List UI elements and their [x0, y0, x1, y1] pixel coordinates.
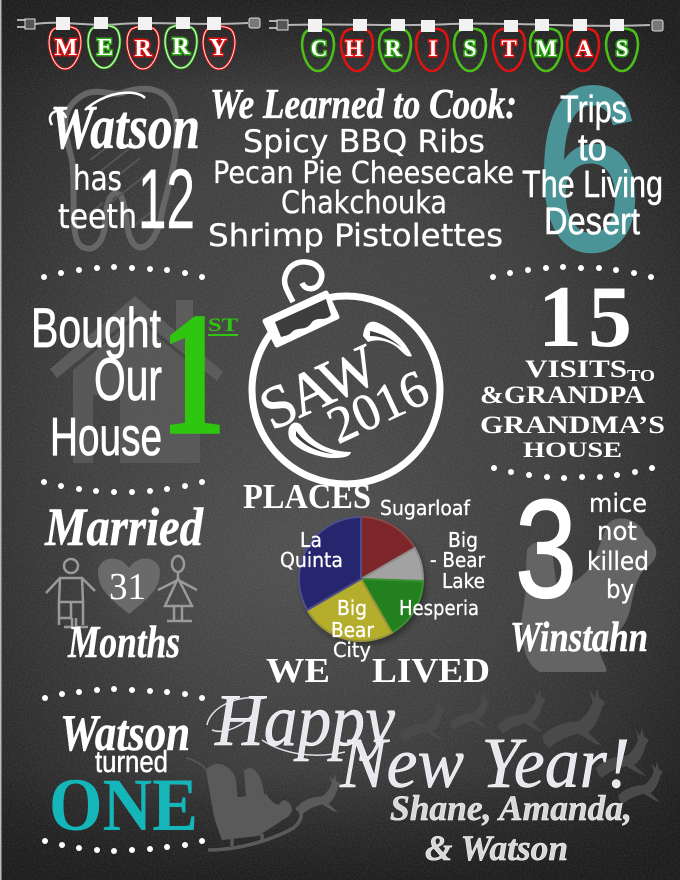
string lights: CHRISTMAS: M [535, 36, 557, 61]
panel: places we lived heading: PLACES [243, 477, 371, 516]
string lights: CHRISTMAS: S [616, 36, 628, 61]
panel: 6 trips to the living desert: Desert [544, 201, 640, 243]
panel: 6 trips to the living desert: Trips [560, 89, 627, 131]
panel: Watson turned one: turned [95, 744, 168, 779]
icon: stick figure woman [158, 556, 197, 621]
panel: family signature [390, 788, 632, 868]
pie labels: La [300, 528, 322, 552]
panel: Watson turned one: Watson [60, 705, 190, 762]
panel: bought our first house: Our [94, 346, 162, 413]
panel: bought our first house: House [50, 407, 162, 467]
panel: bought our first house: Bought [31, 296, 161, 359]
panel: we learned to cook: Spicy BBQ Ribs [243, 124, 485, 160]
panel: 3 mice not killed by Winstahn: by [606, 575, 634, 605]
panel: bought our first house: 1 [160, 277, 226, 472]
string lights: CHRISTMAS [269, 19, 663, 71]
string lights: MERRY: E [97, 35, 113, 61]
panel: Watson has 12 teeth: has [73, 159, 122, 199]
panel: 3 mice not killed by Winstahn [510, 470, 649, 661]
panel: happy new year [207, 680, 630, 803]
panel: places we lived heading: LIVED [372, 651, 490, 690]
panel: happy new year: Happy [214, 680, 395, 762]
panel: married 31 months: 31 [109, 566, 146, 608]
panel: 3 mice not killed by Winstahn: mice [589, 489, 647, 519]
string lights: MERRY: R [172, 34, 190, 60]
panel: bought our first house [31, 277, 238, 472]
panel: 15 visits: TO [627, 366, 655, 385]
panel: married 31 months: Married [44, 497, 204, 557]
panel: 3 mice not killed by Winstahn: 3 [515, 470, 577, 627]
panel: Watson has 12 teeth [50, 93, 200, 246]
pie labels: City [333, 638, 371, 662]
string lights: CHRISTMAS: S [464, 36, 476, 61]
panel: Watson has 12 teeth: Watson [50, 94, 200, 162]
string lights: CHRISTMAS: H [345, 36, 363, 61]
panel: we learned to cook [208, 82, 517, 254]
panel: places we lived heading: WE [266, 651, 330, 690]
icon: tooth [65, 89, 177, 249]
panel: family signature: & Watson [425, 828, 568, 868]
icon: house [50, 296, 223, 463]
panel: 6 trips to the living desert: to [578, 127, 607, 169]
dotted dividers [41, 264, 655, 854]
panel: Watson has 12 teeth: 12 [138, 152, 195, 246]
pie labels: Lake [442, 569, 485, 593]
panel: happy new year: New Year! [339, 723, 630, 803]
panel: 15 visits: HOUSE [523, 437, 622, 462]
pie labels: Big [337, 596, 367, 620]
panel: we learned to cook: Pecan Pie Cheesecake [213, 156, 514, 191]
icon: heart [98, 558, 160, 614]
panel: we learned to cook: Chakchouka [281, 185, 447, 221]
pie chart: places we lived [280, 496, 486, 662]
string lights: MERRY: R [134, 36, 152, 62]
pie labels: Bear [331, 618, 375, 642]
string lights: CHRISTMAS: R [385, 36, 402, 61]
icon: reindeer silhouettes [400, 688, 662, 804]
panel: married 31 months: Months [67, 616, 180, 667]
panel: 3 mice not killed by Winstahn: not [597, 517, 637, 547]
icon: sleigh silhouette [186, 758, 340, 850]
panel: married 31 months [44, 497, 204, 667]
string lights: MERRY [17, 17, 260, 69]
panel: family signature: Shane, Amanda, [390, 788, 632, 828]
icon: stick figure man [46, 559, 95, 627]
ornament year: 2016 [319, 360, 437, 455]
string lights: CHRISTMAS: C [311, 36, 327, 61]
panel: 15 visits: 15 [538, 269, 632, 366]
pie labels: Sugarloaf [380, 496, 471, 520]
string lights: MERRY: Y [209, 35, 227, 61]
panel: 15 visits [480, 269, 665, 462]
icon: cat silhouette [522, 518, 656, 672]
string lights: CHRISTMAS: A [576, 36, 593, 61]
ornament monogram: SAW [249, 331, 388, 443]
string lights: CHRISTMAS: T [501, 36, 517, 61]
panel: we learned to cook: We Learned to Cook: [210, 82, 517, 128]
panel: 15 visits: &GRANDPA [480, 382, 645, 409]
string lights: CHRISTMAS: I [429, 36, 438, 61]
panel: places we lived heading [243, 477, 490, 690]
panel: bought our first house: ST [208, 315, 238, 336]
panel: Watson turned one: ONE [49, 764, 198, 847]
pie labels [280, 496, 486, 662]
panel: we learned to cook: Shrimp Pistolettes [208, 218, 503, 254]
panel: 15 visits: VISITS [525, 356, 627, 383]
pie labels: - Bear [430, 548, 486, 572]
panel: 3 mice not killed by Winstahn: killed [587, 547, 649, 577]
pie labels: Quinta [280, 548, 343, 572]
string lights: MERRY: M [55, 35, 77, 61]
pie labels: Hesperia [399, 596, 479, 620]
icon: Christmas ornament [249, 262, 440, 484]
pie labels: Big [448, 528, 478, 552]
panel: 6 trips to the living desert: 6 [536, 40, 642, 299]
panel: Watson turned one [49, 705, 198, 847]
panel: 15 visits: GRANDMA’S [480, 412, 665, 439]
panel: 3 mice not killed by Winstahn: Winstahn [510, 615, 648, 661]
panel: Watson has 12 teeth: teeth [58, 197, 137, 237]
